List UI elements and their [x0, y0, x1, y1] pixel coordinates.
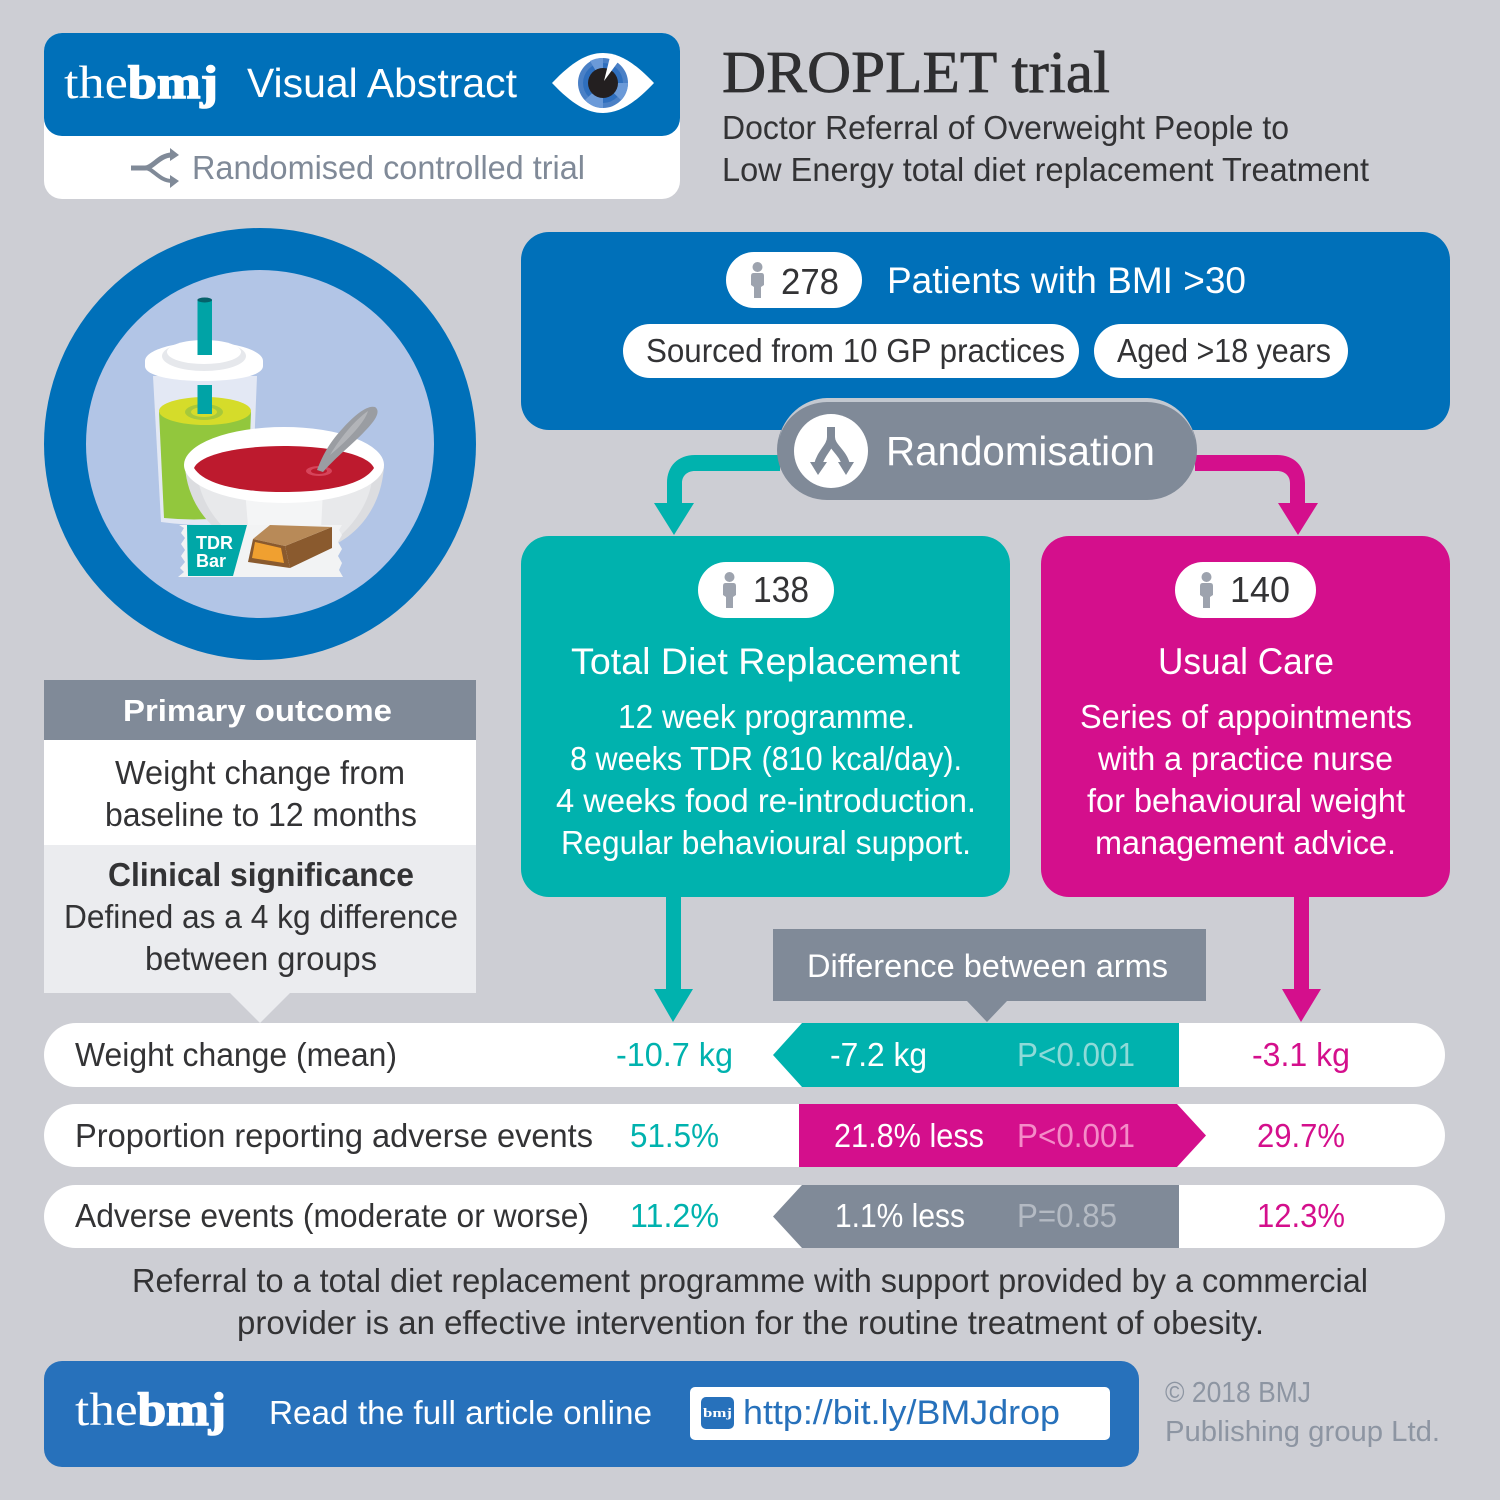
heading: Total Diet Replacement	[571, 641, 961, 682]
row: adverse events moderate or worse	[44, 1185, 1445, 1248]
text: copyright: © 2018 BMJ	[1165, 1377, 1311, 1409]
label: study type: Randomised controlled trial	[192, 149, 585, 186]
text: clinical significance: Clinical significance	[108, 856, 414, 893]
text: programme: Regular behavioural support.	[561, 824, 971, 861]
text: appointments: management advice.	[1095, 824, 1396, 861]
pill: 140	[1175, 562, 1316, 618]
pill: age	[1094, 324, 1348, 378]
text: conclusion	[132, 1262, 1368, 1341]
text: clinical significance: Defined as a 4 kg difference	[64, 898, 458, 935]
pill: 278 patients	[726, 252, 862, 308]
row: proportion reporting adverse events: 51.5%	[630, 1117, 719, 1154]
panel: total diet replacement arm	[521, 536, 1010, 897]
row: proportion reporting adverse events	[44, 1104, 1445, 1167]
icon: TDR bar: Bar	[196, 551, 226, 571]
arrow: usual care to results	[1282, 896, 1321, 1022]
row: proportion reporting adverse events: 21.8% less	[834, 1117, 984, 1154]
pill: randomisation: Randomisation	[886, 428, 1155, 474]
pill: 138	[698, 562, 834, 618]
text: appointments: for behavioural weight	[1087, 782, 1405, 819]
subtitle: Doctor Referral of Overweight People to	[722, 109, 1289, 146]
text: conclusion: provider is an effective intervention for the routine treatment of obesity.	[237, 1304, 1264, 1341]
pill: randomisation	[777, 398, 1197, 500]
label: difference between arms	[773, 929, 1206, 1022]
url box: http://bit.ly/BMJdrop	[743, 1394, 1060, 1432]
icon: TDR bar: TDR	[196, 533, 233, 553]
text: copyright: Publishing group Ltd.	[1165, 1416, 1440, 1448]
pill: age: Aged >18 years	[1117, 332, 1331, 369]
url box	[690, 1387, 1110, 1440]
heading: Usual Care	[1158, 641, 1334, 682]
text: outcome: baseline to 12 months	[105, 796, 417, 833]
arrow: to usual care	[1195, 455, 1318, 535]
row: adverse events moderate or worse: 1.1% less	[835, 1197, 965, 1234]
pill: 138: 138	[753, 569, 809, 610]
row: weight change: P<0.001	[1017, 1036, 1135, 1073]
text: clinical significance	[64, 856, 458, 977]
row: weight change: Weight change (mean)	[75, 1036, 397, 1073]
pill: GP practices	[623, 324, 1079, 378]
text: copyright	[1165, 1377, 1440, 1448]
text: programme	[556, 698, 976, 861]
pill: GP practices: Sourced from 10 GP practices	[646, 332, 1065, 369]
subtitle	[722, 109, 1369, 188]
text: programme: 4 weeks food re-introduction.	[556, 782, 976, 819]
panel: header badge	[44, 33, 680, 199]
row: adverse events moderate or worse: 11.2%	[630, 1197, 719, 1234]
row: adverse events moderate or worse: P=0.85	[1017, 1197, 1117, 1234]
panel: footer	[44, 1361, 1139, 1467]
row: weight change	[44, 1023, 1445, 1087]
icon: eye	[552, 53, 654, 113]
arrow: total diet replacement to results	[654, 896, 693, 1022]
text: patients: Patients with BMI >30	[887, 260, 1246, 301]
text: clinical significance: between groups	[145, 940, 377, 977]
illustration: food in circle	[44, 228, 476, 660]
row: weight change: -3.1 kg	[1252, 1036, 1350, 1073]
icon: split arrows	[794, 414, 868, 488]
text: conclusion: Referral to a total diet replacement programme with support provided by a commercial	[132, 1262, 1368, 1299]
pill: 140: 140	[1230, 569, 1290, 610]
text: outcome	[105, 754, 417, 833]
icon: randomised trial arrows	[131, 148, 179, 188]
icon: TDR bar	[178, 525, 343, 577]
panel: primary outcome	[44, 680, 476, 1023]
label: difference between arms: Difference between arms	[807, 948, 1168, 984]
logo: thebmj: thebmj	[64, 57, 218, 109]
row: weight change: -7.2 kg	[830, 1036, 927, 1073]
logo: thebmj: thebmj	[75, 1384, 226, 1436]
text: appointments: Series of appointments	[1080, 698, 1412, 735]
text: appointments	[1080, 698, 1412, 861]
title: DROPLET trial	[722, 39, 1110, 105]
row: proportion reporting adverse events: P<0.001	[1017, 1117, 1135, 1154]
text: programme: 8 weeks TDR (810 kcal/day).	[570, 740, 962, 777]
panel: usual care arm	[1041, 536, 1450, 897]
panel: participants	[521, 232, 1450, 430]
icon: soup bowl	[184, 407, 384, 550]
text: outcome: Weight change from	[115, 754, 405, 791]
pill: 278 patients: 278	[781, 261, 839, 302]
row: proportion reporting adverse events: Proportion reporting adverse events	[75, 1117, 593, 1154]
row: adverse events moderate or worse: 12.3%	[1257, 1197, 1345, 1234]
url box: bmj	[703, 1405, 732, 1420]
icon: drink cup	[145, 298, 263, 525]
text: read online: Read the full article online	[269, 1394, 652, 1431]
label: Visual Abstract: Visual Abstract	[247, 60, 518, 106]
row: proportion reporting adverse events: 29.7%	[1257, 1117, 1345, 1154]
title block	[722, 39, 1369, 188]
text: appointments: with a practice nurse	[1097, 740, 1393, 777]
row: weight change: -10.7 kg	[616, 1036, 733, 1073]
row: adverse events moderate or worse: Adverse events (moderate or worse)	[75, 1197, 589, 1234]
subtitle: Low Energy total diet replacement Treatment	[722, 151, 1369, 188]
heading: Primary outcome	[123, 693, 392, 728]
text: programme: 12 week programme.	[618, 698, 915, 735]
arrow: to total diet replacement	[654, 455, 780, 535]
